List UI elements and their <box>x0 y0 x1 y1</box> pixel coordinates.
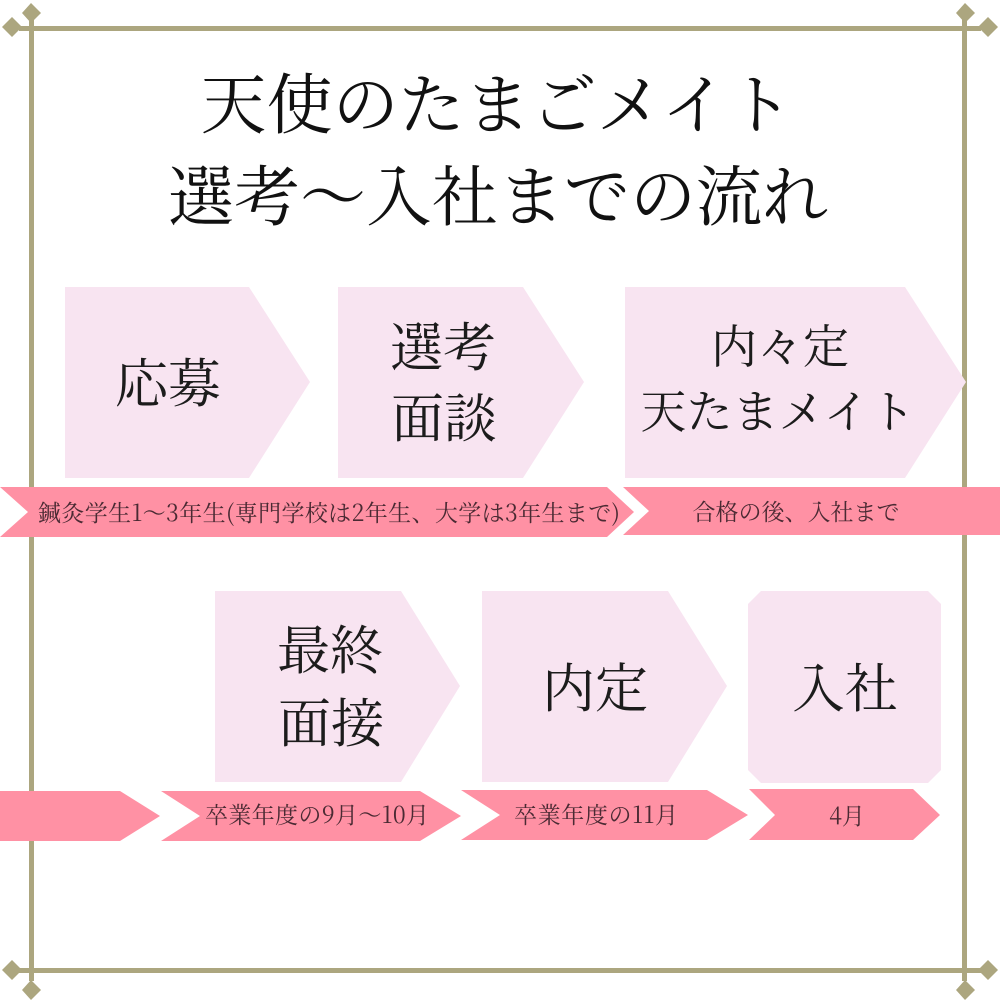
step: 選考面談: 面談 <box>391 391 497 449</box>
step: 応募: 応募 <box>115 356 221 414</box>
step: 入社 <box>748 591 941 783</box>
ribbon: 4月: 4月 <box>829 798 865 831</box>
ribbon: lead-in arrow <box>0 791 160 841</box>
ribbon: 応募資格 <box>0 487 634 537</box>
ribbon: 合格の後: 合格の後、入社まで <box>692 494 900 527</box>
step: 最終面接: 最終 <box>277 623 383 681</box>
ribbon: 卒業年度の11月: 卒業年度の11月 <box>514 797 678 830</box>
ribbon: 卒業年度の9月～10月 <box>161 791 461 841</box>
step: 内々定 天たまメイト <box>625 287 966 478</box>
ribbon: 卒業年度の9月～10月: 卒業年度の9月～10月 <box>205 797 429 830</box>
title: 選考～入社までの流れ <box>168 162 828 235</box>
title <box>168 70 828 235</box>
step: 入社: 入社 <box>792 661 898 719</box>
step: 選考面談: 選考 <box>390 320 496 378</box>
step: 内定: 内定 <box>542 661 648 719</box>
step: 応募 <box>65 287 310 478</box>
ribbon: 合格の後 <box>623 487 1000 535</box>
title: 天使のたまごメイト <box>201 70 793 143</box>
step: 最終面接: 面接 <box>278 696 384 754</box>
ribbon: 卒業年度の11月 <box>461 790 748 840</box>
step: 最終面接 <box>215 591 460 782</box>
step: 内々定 天たまメイト: 天たまメイト <box>640 387 916 438</box>
ribbon: 応募資格: 鍼灸学生1～3年生(専門学校は2年生、大学は3年生まで) <box>38 495 620 528</box>
ribbon: 4月 <box>749 789 940 840</box>
step: 内定 <box>482 591 727 782</box>
step: 内々定 天たまメイト: 内々定 <box>711 322 849 373</box>
step: 選考面談 <box>338 287 584 478</box>
